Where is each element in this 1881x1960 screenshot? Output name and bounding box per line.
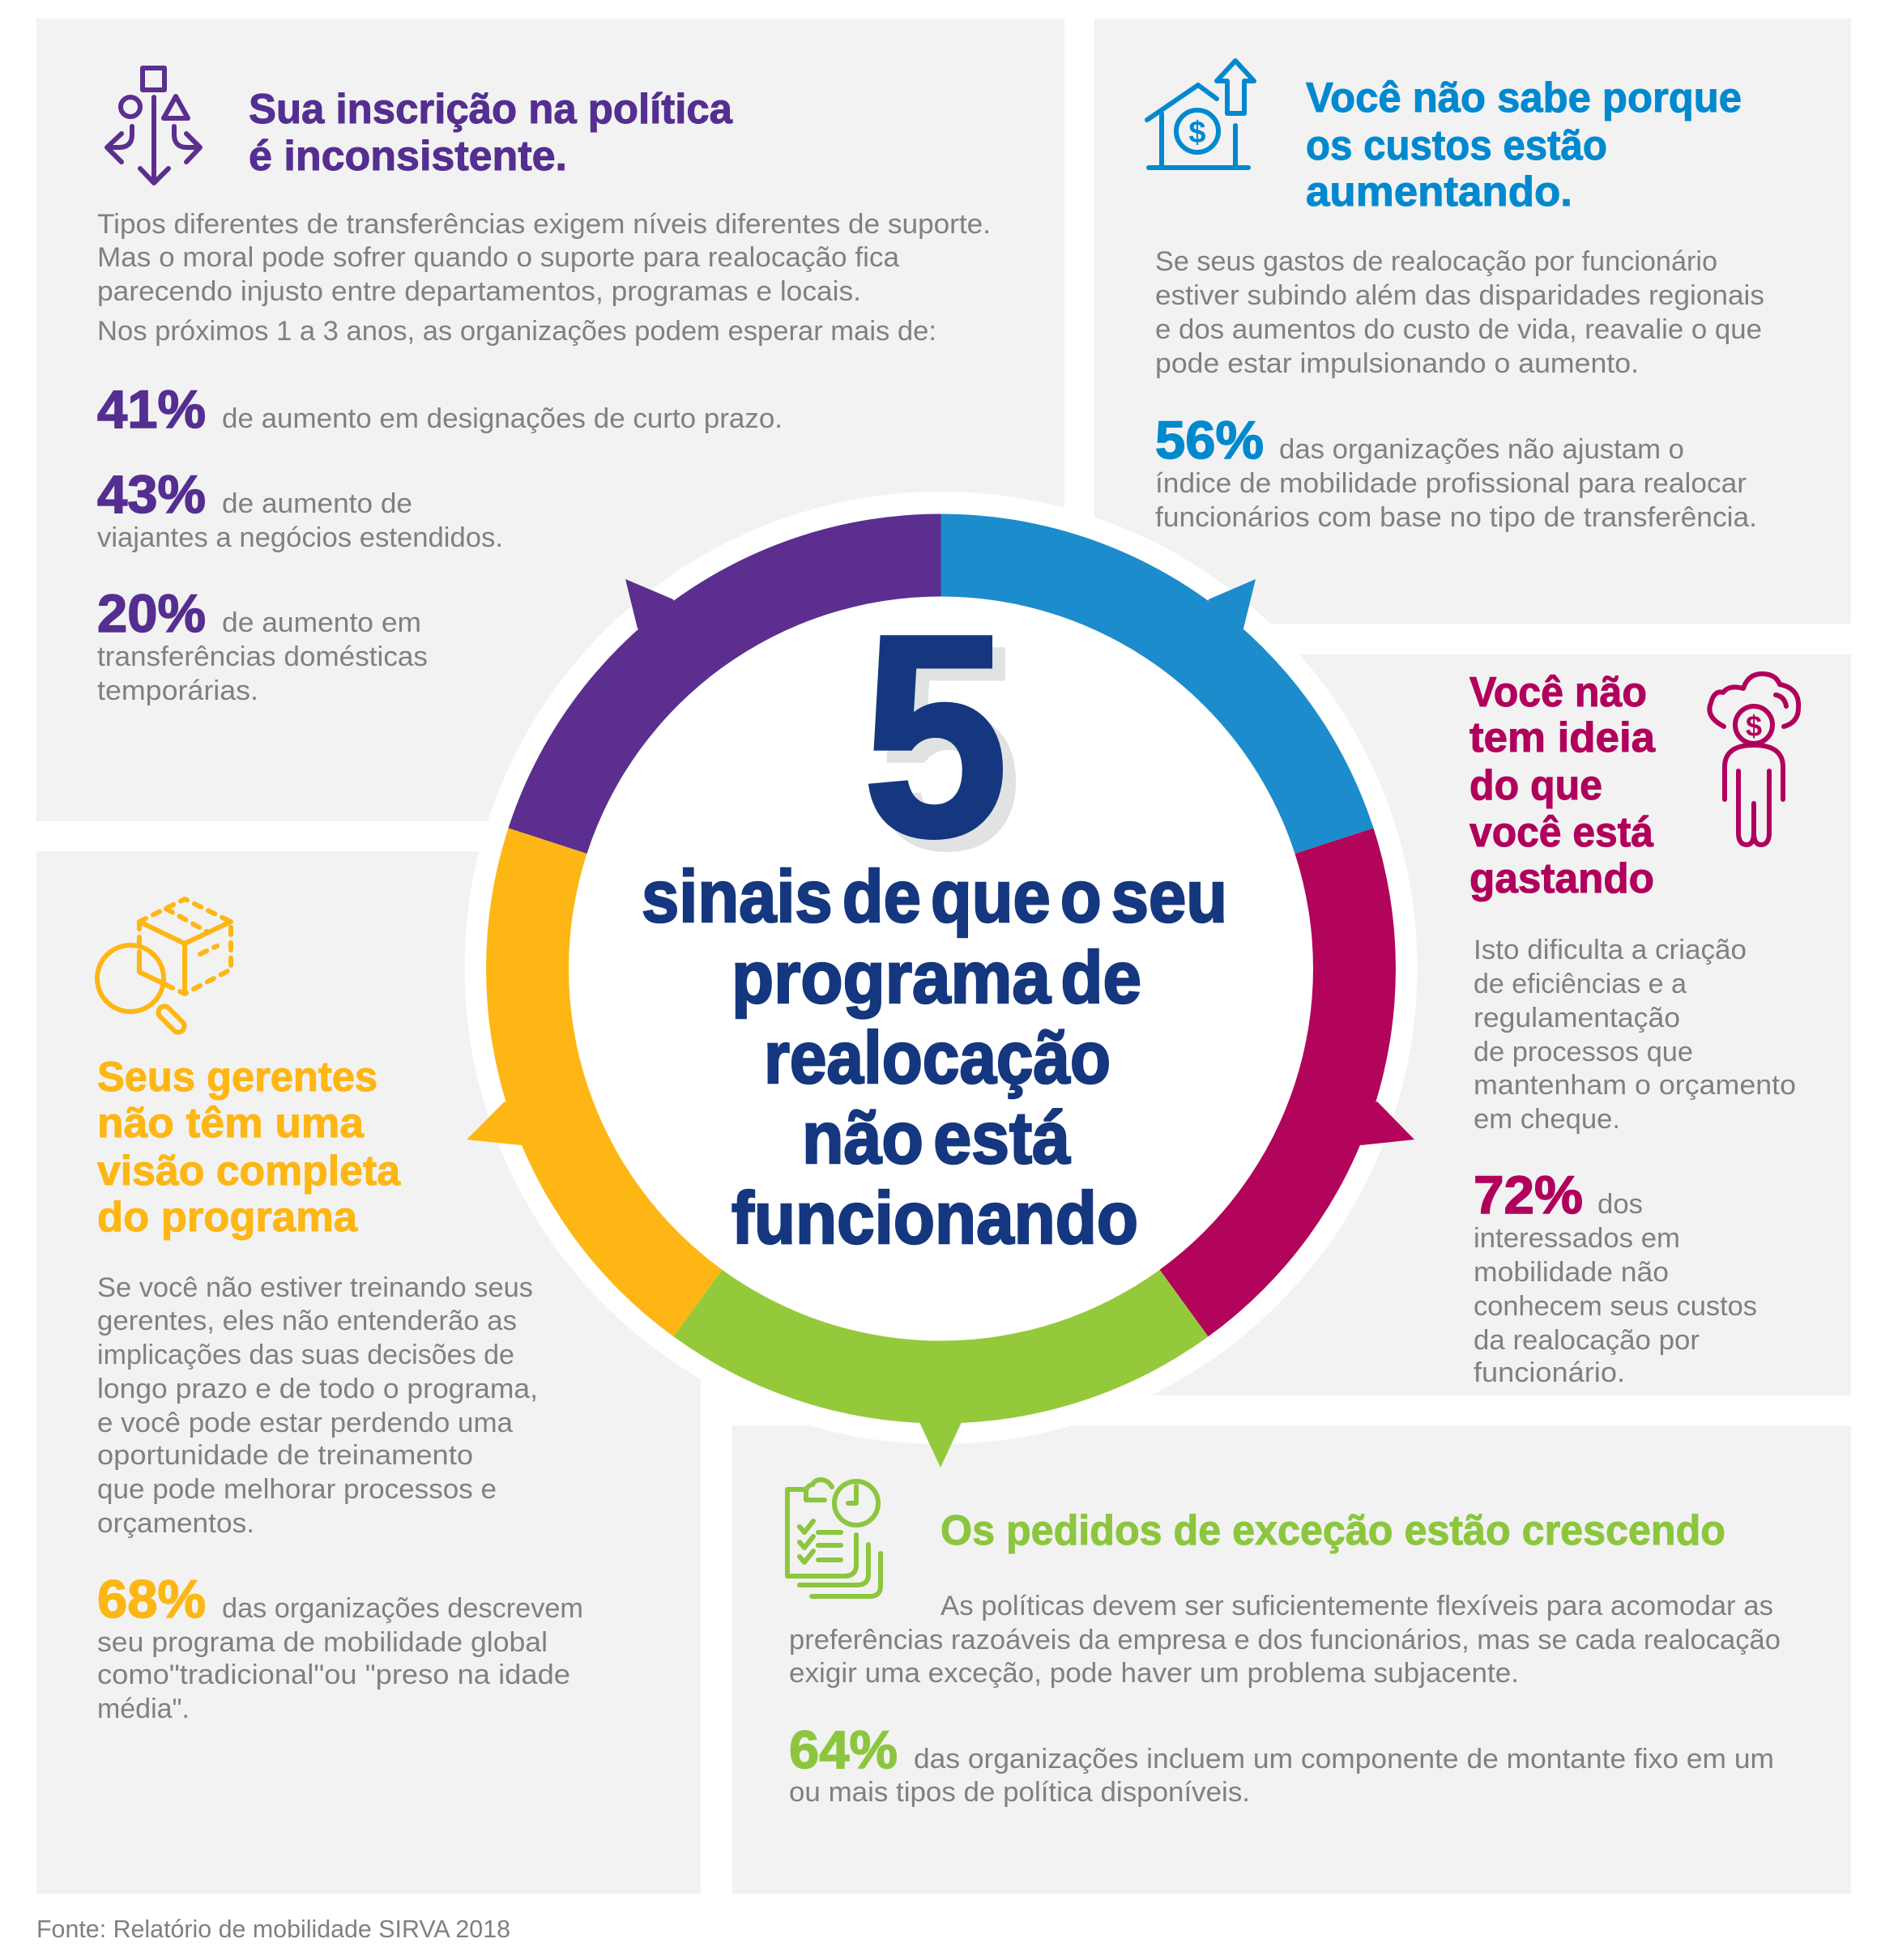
icon glyph: dollar: $ <box>1746 709 1762 743</box>
ring segment: magenta with pointer <box>1160 828 1414 1336</box>
heading: aumentando. <box>1306 168 1572 215</box>
body text <box>1474 935 1796 1135</box>
stat: 43%: 43% <box>97 464 206 524</box>
panel background: custos <box>1094 19 1851 624</box>
stat: 64%: das organizações incluem um componente de montante fixo em um <box>914 1744 1774 1775</box>
icon: shapes and diverging arrows <box>107 68 200 183</box>
stat: 68%: 68% <box>97 1569 206 1629</box>
stat: 72%: mobilidade não <box>1474 1257 1669 1288</box>
ring segment: blue with pointer <box>941 513 1374 854</box>
icon: person with money cloud <box>1709 674 1798 845</box>
title lines: sinais de que o seu <box>642 856 1227 938</box>
ring segment: purple with pointer <box>509 513 941 854</box>
heading <box>97 1054 401 1241</box>
stat: 43%: viajantes a negócios estendidos. <box>97 522 503 553</box>
source note: Fonte: Relatório de mobilidade SIRVA 2018 <box>36 1915 510 1943</box>
stat: 68% <box>97 1569 583 1724</box>
heading: é inconsistente. <box>249 133 567 180</box>
body text: parecendo injusto entre departamentos, programas e locais. <box>97 276 861 307</box>
heading <box>1469 669 1656 902</box>
stat: 72%: dos <box>1597 1189 1643 1220</box>
heading: os custos estão <box>1306 122 1607 169</box>
body text: pode estar impulsionando o aumento. <box>1155 348 1639 379</box>
heading: gastando <box>1469 855 1654 902</box>
panel background: gerentes <box>36 851 701 1894</box>
panel background: política <box>36 19 1064 821</box>
ring segment: yellow with pointer <box>467 828 722 1336</box>
stat: 68%: como"tradicional"ou "preso na idade <box>97 1660 570 1690</box>
panel: política inconsistente <box>97 68 991 706</box>
stat: 20%: 20% <box>97 583 206 643</box>
body text: Mas o moral pode sofrer quando o suporte para realocação fica <box>97 242 899 273</box>
title lines: funcionando <box>732 1178 1138 1259</box>
heading <box>249 86 733 180</box>
body text: gerentes, eles não entenderão as <box>97 1306 517 1336</box>
panel background: exceções <box>732 1425 1851 1894</box>
body text: Se você não estiver treinando seus <box>97 1272 533 1303</box>
body text: Tipos diferentes de transferências exigem níveis diferentes de suporte. <box>97 209 991 240</box>
stat: 72%: interessados em <box>1474 1223 1680 1254</box>
icon glyph: dollar: $ <box>1188 116 1206 150</box>
heading: Você não <box>1469 669 1647 716</box>
body text: em cheque. <box>1474 1104 1620 1135</box>
body text: longo prazo e de todo o programa, <box>97 1374 538 1404</box>
icon: clipboard checklist and clock <box>787 1480 881 1596</box>
title lines: programa de <box>732 937 1141 1019</box>
body text: e você pode estar perdendo uma <box>97 1408 513 1438</box>
big number 5 shadow: 5 <box>875 587 1022 909</box>
stat: 68%: média". <box>97 1694 190 1724</box>
stat: 72%: da realocação por <box>1474 1325 1700 1356</box>
stat: 20%: de aumento em <box>222 607 421 638</box>
body text: exigir uma exceção, pode haver um problema subjacente. <box>789 1658 1519 1689</box>
heading: Você não sabe porque <box>1306 75 1742 121</box>
body text: As políticas devem ser suficientemente flexíveis para acomodar as <box>940 1591 1773 1621</box>
stat: 72%: 72% <box>1474 1165 1583 1225</box>
panel: custos aumentando <box>1147 61 1764 533</box>
body text: Isto dificulta a criação <box>1474 935 1747 965</box>
heading: Seus gerentes <box>97 1054 377 1101</box>
body text: de eficiências e a <box>1474 969 1687 999</box>
heading: Os pedidos de exceção estão crescendo <box>940 1507 1725 1554</box>
stat: 41%: de aumento em designações de curto prazo. <box>222 403 783 434</box>
stat: 64%: 64% <box>789 1719 898 1779</box>
heading <box>1306 75 1742 215</box>
body text <box>1155 246 1764 379</box>
body text: e dos aumentos do custo de vida, reavalie o que <box>1155 314 1762 345</box>
icon: box and magnifier <box>97 899 231 1026</box>
panel background: gastos <box>1094 654 1851 1395</box>
stat: 20%: temporárias. <box>97 675 258 706</box>
stat: 56%: funcionários com base no tipo de transferência. <box>1155 502 1757 533</box>
panel: gastos desconhecidos <box>1469 669 1798 1388</box>
heading: visão completa <box>97 1148 401 1195</box>
stat: 56% <box>1155 410 1757 533</box>
stat: 72%: conhecem seus custos <box>1474 1291 1757 1322</box>
stat: 72% <box>1474 1165 1757 1388</box>
body text: implicações das suas decisões de <box>97 1340 514 1370</box>
title lines <box>642 856 1227 1259</box>
body text: Se seus gastos de realocação por funcionário <box>1155 246 1717 277</box>
body text: regulamentação <box>1474 1003 1680 1033</box>
body text: estiver subindo além das disparidades regionais <box>1155 280 1764 311</box>
heading: você está <box>1469 809 1654 856</box>
title lines: realocação <box>764 1017 1111 1099</box>
heading: tem ideia <box>1469 714 1656 761</box>
stat: 64%: ou mais tipos de política disponíveis. <box>789 1777 1250 1808</box>
body text <box>97 209 991 347</box>
heading: não têm uma <box>97 1100 365 1147</box>
icon: house with coin and up arrow <box>1147 61 1254 168</box>
body text: preferências razoáveis da empresa e dos funcionários, mas se cada realocação <box>789 1625 1781 1655</box>
ring segment: green with pointer <box>674 1270 1209 1468</box>
stat: 56%: 56% <box>1155 410 1264 470</box>
panel: pedidos de exceção <box>787 1480 1781 1808</box>
central graphic: white halo, ring and pointers <box>465 492 1418 1468</box>
title lines: não está <box>802 1097 1070 1179</box>
body text <box>789 1591 1781 1689</box>
stat: 68%: seu programa de mobilidade global <box>97 1627 548 1658</box>
body text: mantenham o orçamento <box>1474 1070 1796 1101</box>
heading: Sua inscrição na política <box>249 86 733 133</box>
stat: 56%: das organizações não ajustam o <box>1279 434 1684 465</box>
body text: que pode melhorar processos e <box>97 1474 497 1505</box>
body text: Nos próximos 1 a 3 anos, as organizações podem esperar mais de: <box>97 316 936 347</box>
stat: 41% <box>97 379 783 439</box>
stat: 72%: funcionário. <box>1474 1357 1625 1388</box>
big number 5: 5 <box>862 575 1009 897</box>
stat: 43% <box>97 464 503 553</box>
stat: 64% <box>789 1719 1774 1808</box>
stat: 41%: 41% <box>97 379 206 439</box>
body text <box>97 1272 538 1539</box>
heading: do que <box>1469 762 1602 809</box>
stat: 68%: das organizações descrevem <box>222 1593 583 1624</box>
body text: de processos que <box>1474 1037 1693 1067</box>
stat: 43%: de aumento de <box>222 488 412 519</box>
stat: 56%: índice de mobilidade profissional para realocar <box>1155 468 1747 499</box>
body text: orçamentos. <box>97 1508 254 1539</box>
stat: 20% <box>97 583 428 706</box>
stat: 20%: transferências domésticas <box>97 641 428 672</box>
body text: oportunidade de treinamento <box>97 1440 473 1471</box>
heading: do programa <box>97 1194 358 1241</box>
panel: gerentes sem visão <box>97 899 583 1724</box>
central title <box>642 575 1227 1259</box>
